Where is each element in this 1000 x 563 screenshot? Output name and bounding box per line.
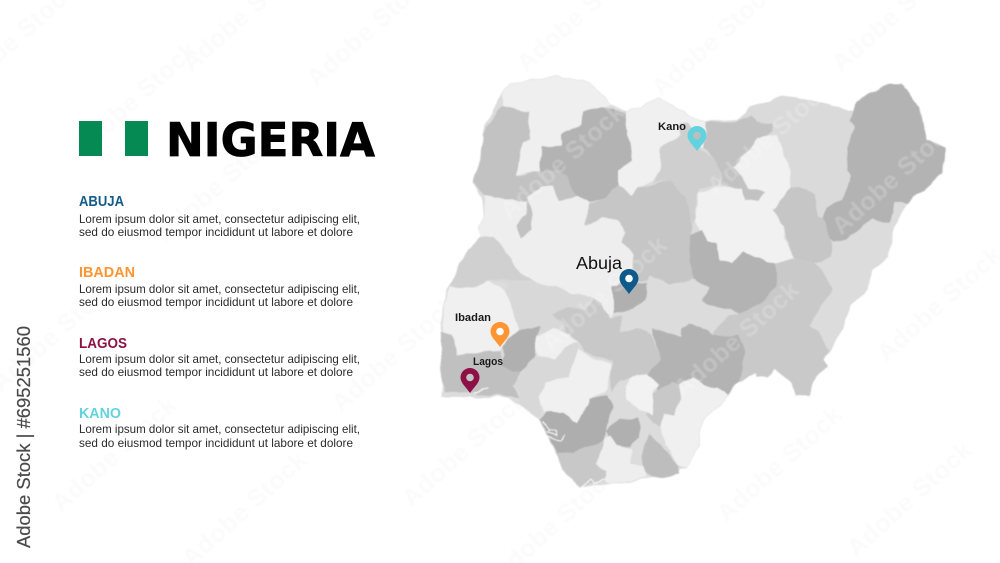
state: Rivers: [557, 440, 607, 487]
state: Enugu: [625, 368, 660, 415]
state: Kaduna: [585, 180, 693, 287]
text block: Abuja: [79, 194, 360, 239]
state: Osun: [500, 327, 540, 372]
map label: Ibadan: Ibadan: [455, 312, 491, 324]
text block: Ibadan: sed do eiusmod tempor incididunt ut labore et dolore: [79, 295, 353, 309]
text: Adobe Stock: [326, 291, 463, 417]
text block: Abuja: ABUJA: [79, 194, 124, 210]
state: Kwara: [493, 280, 590, 340]
text block: Kano: sed do eiusmod tempor incididunt ut labore et dolore: [79, 436, 353, 450]
state: Sokoto: [502, 77, 612, 177]
text block: Lagos: LAGOS: [79, 336, 127, 352]
text block: Abuja: sed do eiusmod tempor incididunt ut labore et dolore: [79, 225, 353, 239]
text block: Kano: Lorem ipsum dolor sit amet, consectetur adipiscing elit,: [79, 422, 360, 436]
text block: Ibadan: IBADAN: [79, 265, 135, 281]
coastal creeks: [473, 389, 605, 487]
map of Nigeria: Adobe Stock: [701, 74, 838, 200]
text: Adobe Stock: [46, 391, 183, 517]
text block: Lagos: Lorem ipsum dolor sit amet, consectetur adipiscing elit,: [79, 352, 360, 366]
state: Edo: [538, 350, 610, 423]
map of Nigeria: Adobe Stock: [536, 231, 673, 357]
state: Kwara west: [447, 237, 530, 290]
state: Akwa Ibom: [643, 435, 679, 477]
map pin: Lagos: [460, 368, 480, 393]
map label: Lagos: Lagos: [473, 356, 503, 368]
country silhouette: [441, 77, 945, 487]
state: Katsina: [618, 99, 705, 195]
state: Bauchi: [695, 136, 795, 263]
state: Kogi: [553, 298, 660, 392]
map label: Abuja: Abuja: [576, 253, 622, 273]
text block: Lagos: sed do eiusmod tempor incididunt ut labore et dolore: [79, 365, 353, 379]
map label: Kano: Kano: [658, 121, 686, 133]
state: Nasarawa: [620, 275, 733, 337]
map of Nigeria: Adobe Stock: [826, 114, 963, 240]
state: Ondo: [512, 342, 578, 417]
map of Nigeria: Adobe Stock: [668, 276, 805, 402]
state: Cross River: [660, 377, 728, 468]
map regions: [441, 77, 945, 487]
text block: Ibadan: Lorem ipsum dolor sit amet, consectetur adipiscing elit,: [79, 282, 360, 296]
state: Zamfara: [540, 107, 632, 203]
state: Gombe: [773, 187, 832, 262]
text block: Kano: KANO: [79, 406, 121, 422]
stock credit: Adobe Stock | #695251560: [13, 326, 34, 548]
heading: NIGERIA: NIGERIA: [166, 113, 375, 167]
state: Benue: [647, 323, 746, 396]
state: Ebonyi: [645, 382, 682, 427]
text block: Lagos: [79, 336, 360, 379]
state: Niger: [478, 186, 633, 318]
text: Adobe Stock: [711, 401, 848, 527]
state: Kebbi: [473, 105, 578, 238]
state: Plateau: [690, 230, 777, 313]
state: Taraba: [713, 260, 833, 395]
state: Yobe: [737, 97, 855, 218]
text block: Ibadan: [79, 265, 360, 309]
state: Ogun: [441, 332, 521, 397]
state: Delta: [540, 393, 613, 453]
text: Adobe Stock: [151, 121, 288, 247]
map of Nigeria: Adobe Stock: [494, 98, 631, 224]
state: Federal Capital Territory: [613, 283, 648, 312]
state: Abia: [597, 437, 647, 483]
title: flag and country name: [79, 113, 375, 167]
state: Oyo: [443, 280, 520, 357]
state: Jigawa: [705, 115, 773, 202]
text: Adobe Stock: [841, 436, 978, 562]
state: Imo: [607, 418, 640, 448]
map of Nigeria: [441, 74, 963, 487]
map pin: Abuja: [620, 269, 638, 294]
state: Ekiti: [535, 327, 578, 358]
map pin: Ibadan: [490, 322, 510, 347]
text: Adobe Stock: [66, 36, 203, 162]
text block: Kano: [79, 406, 360, 450]
map pin: Kano: [688, 126, 706, 151]
icon: Nigerian flag: [79, 121, 148, 156]
state: Kano: [653, 122, 722, 227]
text block: Abuja: Lorem ipsum dolor sit amet, consectetur adipiscing elit,: [79, 212, 360, 226]
text: Adobe Stock: [396, 386, 533, 512]
state: Borno: [819, 83, 945, 242]
